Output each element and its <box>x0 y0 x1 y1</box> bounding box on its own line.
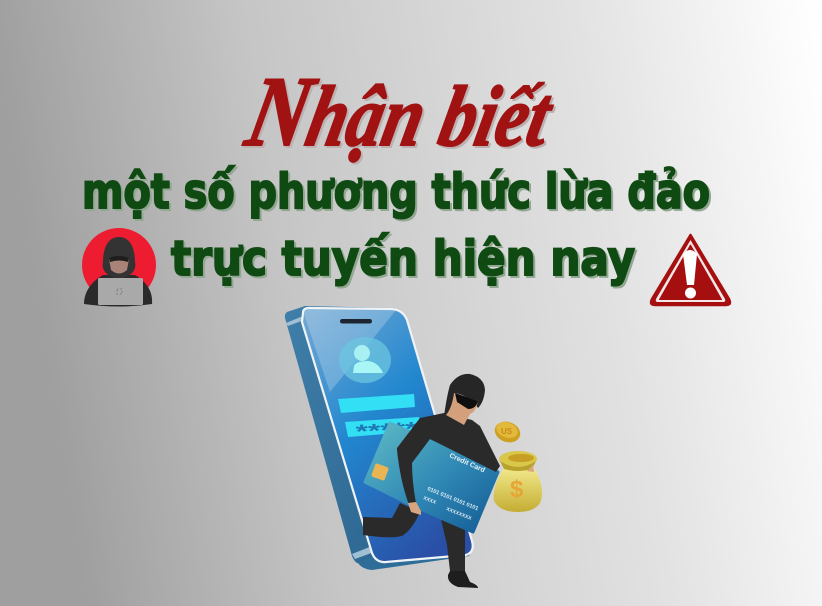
password field: ***** <box>355 419 419 443</box>
phone screen <box>302 308 473 562</box>
illustration: thief <box>363 374 500 588</box>
title: Nhận biết: Nhận biết <box>238 56 564 167</box>
icon: hacker with laptop <box>82 228 156 306</box>
illustration: money bag <box>494 451 542 512</box>
face and neck <box>446 393 478 425</box>
phone speaker <box>340 319 372 324</box>
heading line 2: một số phương thức lừa đảo <box>84 166 712 222</box>
shoe <box>448 571 478 588</box>
illustration: phone <box>285 306 473 570</box>
card: XXXXXXXX <box>445 506 473 522</box>
heading line 3: trực tuyến hiện nay <box>171 231 635 287</box>
front leg <box>440 515 465 571</box>
password field <box>345 417 421 443</box>
login field <box>338 394 415 413</box>
card: Credit Card <box>448 452 486 474</box>
user avatar <box>339 337 391 383</box>
back leg <box>363 503 420 537</box>
card <box>365 413 500 532</box>
illustration: money bag: $ <box>510 476 524 503</box>
illustration: gold coin: US <box>501 427 513 436</box>
hand <box>408 502 421 515</box>
hood <box>444 374 485 416</box>
card: 0101 0101 0101 0101 <box>426 486 479 512</box>
title: Nhận biết: Nhận biết <box>240 58 566 169</box>
card: XXXX <box>422 495 437 506</box>
mask <box>455 393 478 409</box>
heading line 3: trực tuyến hiện nay <box>173 233 637 289</box>
icon: warning triangle <box>651 235 730 305</box>
illustration: gold coin <box>492 418 523 446</box>
heading line 2: một số phương thức lừa đảo <box>82 164 710 220</box>
